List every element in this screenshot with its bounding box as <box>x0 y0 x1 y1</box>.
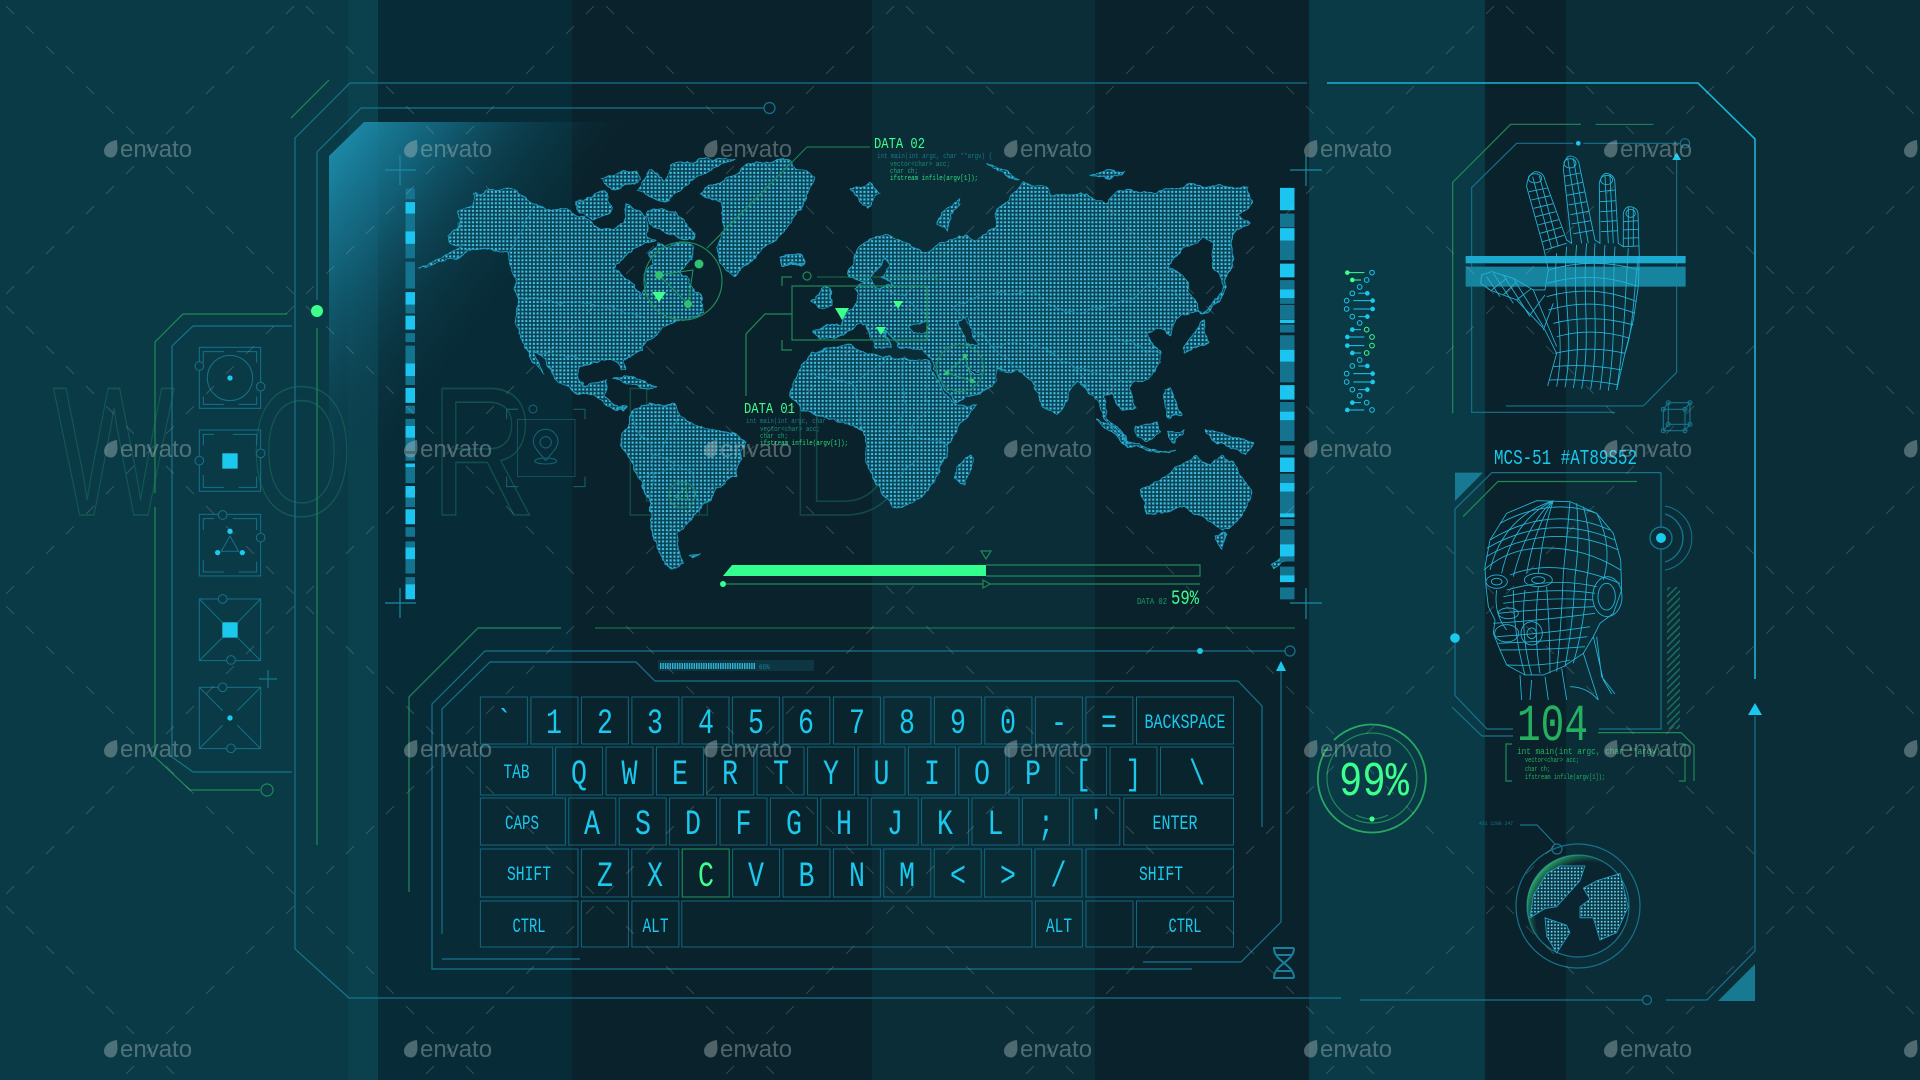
big number 104: 104 <box>1517 697 1588 756</box>
marker group: Middle East <box>936 344 984 392</box>
icon: triangle nodes <box>199 511 265 576</box>
map coastlines <box>418 158 1293 570</box>
key row 4: SHIFT <box>507 864 551 887</box>
marker group: Europe <box>746 272 937 396</box>
envato watermark words: envato <box>1320 136 1392 163</box>
map borders <box>507 207 1180 513</box>
marker group: North America <box>644 185 770 320</box>
faint WORLD outline title: L <box>616 350 713 555</box>
label: DATA 01 <box>744 401 861 448</box>
key row 2 <box>480 747 1233 795</box>
code block: char ch; <box>1525 766 1550 774</box>
envato watermark words: envato <box>120 136 192 163</box>
scanner eye <box>1650 506 1692 570</box>
key row 1: 1 <box>546 704 562 744</box>
key row 5: CTRL <box>512 916 546 939</box>
faint WORLD outline title: O <box>250 349 353 554</box>
globe: 431 1298 247 <box>1479 821 1513 827</box>
gauge: 99 percent: 99% <box>1339 756 1409 810</box>
panel: face scan <box>1450 473 1694 782</box>
key row 1: 0 <box>1000 704 1016 744</box>
key row 3: CAPS <box>505 813 539 836</box>
envato watermark words: envato <box>420 136 492 163</box>
glowing map panel <box>329 122 680 620</box>
icon: pyramid square <box>199 595 261 664</box>
key row 2: TAB <box>504 762 530 785</box>
faint WORLD outline title <box>53 348 912 555</box>
key row 3: J <box>887 805 903 845</box>
key row 5: CTRL <box>1168 916 1202 939</box>
key row 1: = <box>1101 704 1117 744</box>
inner frame with green node <box>311 102 775 845</box>
envato watermark words: envato <box>720 436 792 463</box>
keyboard frame <box>409 628 1295 969</box>
key row 2: O <box>974 755 990 795</box>
key row 2: Y <box>823 755 839 795</box>
code block <box>1506 733 1694 782</box>
key row 3: ENTER <box>1152 813 1198 836</box>
key row 2: T <box>773 755 789 795</box>
hand frame <box>1453 124 1690 413</box>
icon: square target <box>195 430 265 491</box>
panel: left icon column <box>155 314 292 796</box>
icon: cross dot <box>199 683 261 753</box>
key row 1: BACKSPACE <box>1144 712 1226 735</box>
label: DATA 01: char ch; <box>760 433 788 441</box>
key row 1 <box>480 697 1233 744</box>
key row 3: A <box>584 805 600 845</box>
key row 4: V <box>748 857 764 897</box>
envato watermark words: envato <box>420 436 492 463</box>
envato watermark words: envato <box>720 136 792 163</box>
key row 2: U <box>874 755 890 795</box>
envato watermark words: envato <box>1020 1036 1092 1063</box>
progress value: 59% <box>1171 588 1200 611</box>
envato watermark words: envato <box>120 436 192 463</box>
key row 2: W <box>622 755 638 795</box>
key row 2: ] <box>1126 755 1142 795</box>
code block: ifstream infile(argv[1]); <box>1525 774 1605 782</box>
globe <box>1479 821 1640 968</box>
key row 3: G <box>786 805 802 845</box>
key row 5 <box>480 901 1233 947</box>
label: DATA 02: char ch; <box>890 168 918 176</box>
key row 4: X <box>647 857 663 897</box>
faint WORLD outline title: D <box>786 350 912 555</box>
progress bar <box>720 551 1200 588</box>
label: DATA 01: ifstream infile(argv[1]); <box>760 440 848 448</box>
key row 1: - <box>1051 704 1067 744</box>
envato watermark words: envato <box>420 1036 492 1063</box>
key row 3: L <box>988 805 1004 845</box>
label: DATA 02: DATA 02 <box>874 136 925 153</box>
head wireframe <box>1484 501 1622 700</box>
outer frame lines <box>291 80 1755 1004</box>
keyboard keys <box>480 697 1233 947</box>
key row 1: 6 <box>798 704 814 744</box>
key row 2: Q <box>571 755 587 795</box>
left segmented bar <box>406 189 415 599</box>
key row 2: [ <box>1075 755 1091 795</box>
faint WORLD outline title: W <box>53 348 175 554</box>
label: DATA 01: DATA 01 <box>744 401 795 418</box>
crosshair marks <box>385 155 1322 619</box>
envato watermark words: envato <box>1320 1036 1392 1063</box>
panel: hand scan <box>1453 124 1692 433</box>
key row 4: B <box>798 857 814 897</box>
faint WORLD outline title: R <box>430 349 536 555</box>
key row 1: 4 <box>698 704 714 744</box>
hand wireframe <box>1481 156 1639 391</box>
label: DATA 02: ifstream infile(argv[1]); <box>890 175 978 183</box>
corner triangle: bottom right <box>1718 964 1755 1001</box>
envato watermark words: envato <box>420 736 492 763</box>
envato watermark words: envato <box>1320 736 1392 763</box>
envato watermark words: envato <box>720 1036 792 1063</box>
key row 4: < <box>950 857 966 897</box>
key row 2: R <box>722 755 738 795</box>
key row 3: H <box>836 805 852 845</box>
key row 4: SHIFT <box>1139 864 1183 887</box>
key row 3: ; <box>1038 805 1054 845</box>
key row 1: 2 <box>597 704 613 744</box>
icon: cube <box>1661 401 1692 433</box>
small loading bar: 65% <box>759 664 770 671</box>
envato watermark words: envato <box>1620 136 1692 163</box>
code block: int main(int argc, char **argv) { <box>1517 746 1670 757</box>
key row 3: D <box>685 805 701 845</box>
label: DATA 02: int main(int argc, char **argv) { <box>877 153 992 161</box>
envato watermark words: envato <box>120 1036 192 1063</box>
envato watermark words: envato <box>1020 436 1092 463</box>
key row 4 <box>480 849 1233 897</box>
code block: vector<char> acc; <box>1525 757 1579 765</box>
envato watermark words <box>120 136 1692 1063</box>
key row 3 <box>480 798 1233 845</box>
envato watermark words: envato <box>1620 436 1692 463</box>
gauge: 99 percent <box>1318 725 1426 833</box>
key row 1: 7 <box>849 704 865 744</box>
label: DATA 01: vector<char> acc; <box>760 426 820 434</box>
key row 1: 3 <box>647 704 663 744</box>
label: DATA 02 <box>707 136 992 248</box>
key row 2: E <box>672 755 688 795</box>
map dot fill <box>426 158 1291 568</box>
envato watermark words: envato <box>1320 436 1392 463</box>
right segmented bar <box>1280 188 1294 599</box>
marker group: South America <box>669 482 695 508</box>
key row 4: N <box>849 857 865 897</box>
key row 1: 9 <box>950 704 966 744</box>
key row 2: \ <box>1189 755 1205 795</box>
key row 4: M <box>899 857 915 897</box>
key row 1: 8 <box>899 704 915 744</box>
label: DATA 01: int main(int argc, char **argv) { <box>746 418 861 426</box>
key row 3: F <box>736 805 752 845</box>
key row 5: ALT <box>642 916 668 939</box>
key row 4: / <box>1050 857 1066 897</box>
envato watermark words: envato <box>1020 136 1092 163</box>
envato watermark words: envato <box>720 736 792 763</box>
progress value <box>1137 588 1200 611</box>
icon: DNA hourglass <box>1273 948 1294 978</box>
envato watermark words: envato <box>1020 736 1092 763</box>
scan bars <box>1466 256 1686 287</box>
label: chip id: MCS-51 #AT89S52 <box>1494 448 1637 471</box>
key row 1: 5 <box>748 704 764 744</box>
key row 2: I <box>924 755 940 795</box>
key row 5: ALT <box>1046 916 1072 939</box>
icon: location pin <box>507 405 585 487</box>
label: DATA 02: vector<char> acc; <box>890 161 950 169</box>
DNA strand <box>1344 270 1375 412</box>
icon: circle target <box>195 347 265 408</box>
key row 2: P <box>1025 755 1041 795</box>
small loading bar <box>658 660 814 671</box>
key row 3: S <box>635 805 651 845</box>
key row 1: ` <box>496 704 512 744</box>
key row 4: Z <box>597 857 613 897</box>
world map <box>406 157 1356 600</box>
envato watermark words: envato <box>120 736 192 763</box>
hatched strip <box>1667 587 1680 729</box>
key row 3: ' <box>1088 805 1104 845</box>
key row 4: > <box>1000 857 1016 897</box>
progress value: DATA 02 <box>1137 597 1167 607</box>
key row 4: C <box>698 857 714 897</box>
triangle arrow: right frame <box>1748 703 1762 715</box>
envato watermark words: envato <box>1620 1036 1692 1063</box>
key row 3: K <box>937 805 953 845</box>
envato watermark words: envato <box>1620 736 1692 763</box>
